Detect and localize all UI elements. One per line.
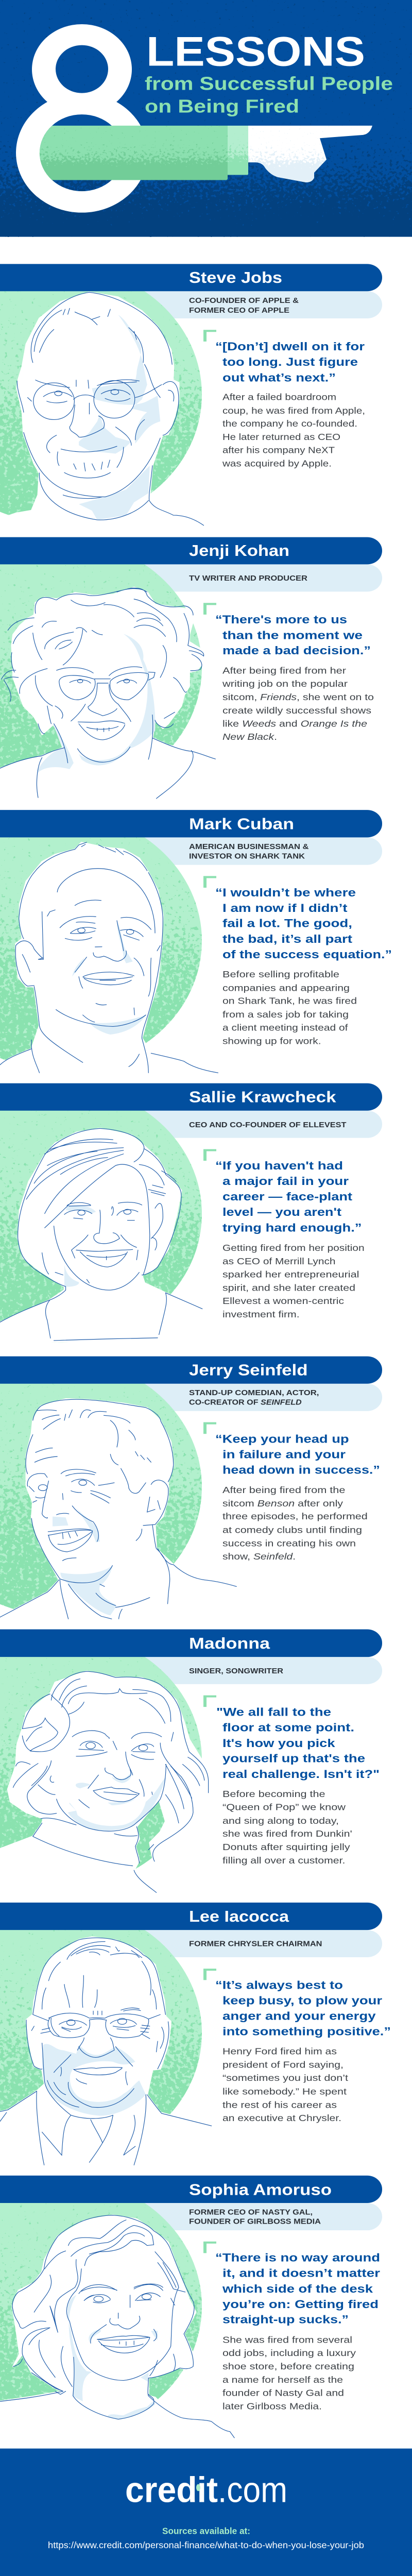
description: create wildly successful shows bbox=[222, 706, 371, 716]
role bbox=[189, 2208, 321, 2226]
description: showing up for work. bbox=[222, 1036, 321, 1046]
subtitle: from Successful People bbox=[145, 74, 393, 94]
portrait: Jerry Seinfeld bbox=[0, 1399, 236, 1620]
description: sparked her entrepreneurial bbox=[222, 1270, 359, 1279]
description bbox=[222, 392, 365, 469]
logo: credit.com: .com bbox=[218, 2470, 287, 2510]
quote: It's how you pick bbox=[222, 1737, 335, 1750]
name: Madonna bbox=[189, 1634, 270, 1652]
description: After a failed boardroom bbox=[222, 392, 336, 402]
quote: straight-up sucks.” bbox=[222, 2313, 349, 2326]
portrait: Steve Jobs bbox=[0, 292, 205, 532]
description bbox=[222, 1485, 368, 1562]
description: odd jobs, including a luxury bbox=[222, 2348, 356, 2358]
portrait: Sophia Amoruso bbox=[0, 2215, 234, 2438]
quote: of the success equation.” bbox=[222, 948, 392, 961]
description: investment firm. bbox=[222, 1310, 300, 1319]
quote bracket bbox=[203, 1696, 216, 1707]
quote: into something positive.” bbox=[222, 2025, 391, 2038]
panel: Sallie Krawcheck bbox=[0, 1083, 382, 1343]
role: CO-CREATOR OF SEINFELD bbox=[189, 1398, 302, 1406]
quote: “There's more to us bbox=[215, 613, 347, 626]
name: Lee Iacocca bbox=[189, 1907, 289, 1925]
quote: head down in success.” bbox=[222, 1464, 380, 1476]
panel: Madonna bbox=[0, 1630, 382, 1892]
role: FORMER CHRYSLER CHAIRMAN bbox=[189, 1940, 322, 1948]
description: Donuts after squirting jelly bbox=[222, 1842, 351, 1852]
quote bracket bbox=[203, 2242, 216, 2253]
description: sitcom, Friends , she went on to bbox=[222, 692, 374, 702]
quote: fail a lot. The good, bbox=[222, 917, 352, 929]
portrait: Mark Cuban bbox=[0, 842, 218, 1077]
subtitle bbox=[145, 74, 393, 117]
quote: in failure and your bbox=[222, 1448, 346, 1461]
quote bbox=[215, 886, 392, 961]
description: as CEO of Merrill Lynch bbox=[222, 1257, 335, 1266]
description bbox=[222, 1243, 365, 1319]
description: the rest of his career as bbox=[222, 2100, 337, 2110]
description: show, Seinfeld . bbox=[222, 1552, 296, 1562]
role bbox=[189, 297, 299, 315]
quote: I am now if I didn’t bbox=[222, 902, 348, 914]
description bbox=[222, 2047, 348, 2123]
quote: it, and it doesn’t matter bbox=[222, 2266, 380, 2279]
description: president of Ford saying, bbox=[222, 2060, 344, 2070]
quote bracket bbox=[203, 1422, 216, 1434]
description: she was fired from Dunkin' bbox=[222, 1829, 352, 1839]
icon: pointing hand and sleeve bbox=[36, 126, 374, 184]
description: He later returned as CEO bbox=[222, 432, 340, 442]
quote: made a bad decision.” bbox=[222, 644, 371, 657]
description: Ellevest a women-centric bbox=[222, 1296, 344, 1306]
description: sitcom Benson after only bbox=[222, 1499, 344, 1509]
description: an executive at Chrysler. bbox=[222, 2113, 341, 2123]
description: was acquired by Apple. bbox=[222, 459, 332, 469]
role: FOUNDER OF GIRLBOSS MEDIA bbox=[189, 2217, 321, 2226]
description: from a sales job for taking bbox=[222, 1010, 349, 1020]
name: Jerry Seinfeld bbox=[189, 1361, 308, 1379]
quote: anger and your energy bbox=[222, 2010, 376, 2022]
role: CO-FOUNDER OF APPLE & bbox=[189, 297, 299, 305]
panel: Lee Iacocca bbox=[0, 1903, 391, 2166]
description: after his company NeXT bbox=[222, 445, 335, 455]
quote: “If you haven't had bbox=[215, 1159, 343, 1172]
panel: Mark Cuban bbox=[0, 810, 392, 1077]
quote: “Keep your head up bbox=[215, 1433, 349, 1445]
description: writing job on the popular bbox=[222, 679, 348, 689]
quote bbox=[215, 1978, 391, 2038]
quote: floor at some point. bbox=[222, 1721, 354, 1734]
quote bbox=[215, 1433, 380, 1476]
title: LESSONS: LESSONS bbox=[146, 28, 365, 74]
name: Steve Jobs bbox=[189, 269, 282, 286]
portrait: Jenji Kohan bbox=[0, 587, 215, 802]
quote: “[Don’t] dwell on it for bbox=[215, 340, 365, 353]
portrait: Madonna bbox=[0, 1671, 209, 1892]
quote: than the moment we bbox=[222, 629, 363, 641]
description bbox=[222, 2335, 356, 2412]
quote: “I wouldn’t be where bbox=[215, 886, 356, 899]
description: a client meeting instead of bbox=[222, 1023, 349, 1033]
footer panel bbox=[0, 2449, 412, 2576]
description: the company he co-founded. bbox=[222, 419, 357, 429]
description: coup, he was fired from Apple, bbox=[222, 406, 365, 416]
name: Jenji Kohan bbox=[189, 542, 289, 560]
description: like Weeds and Orange Is the bbox=[222, 719, 367, 728]
quote: the bad, it’s all part bbox=[222, 933, 352, 945]
sources heading: Sources available at: bbox=[162, 2527, 250, 2536]
quote: career — face-plant bbox=[222, 1190, 352, 1203]
quote bracket bbox=[203, 1969, 216, 1980]
name: Mark Cuban bbox=[189, 815, 294, 833]
quote: “It’s always best to bbox=[215, 1978, 343, 1991]
subtitle: on Being Fired bbox=[145, 96, 299, 117]
name: Sallie Krawcheck bbox=[189, 1088, 336, 1106]
quote: you’re on: Getting fired bbox=[222, 2298, 379, 2311]
quote: yourself up that's the bbox=[222, 1752, 365, 1765]
description: a name for herself as the bbox=[222, 2375, 343, 2385]
role: CEO AND CO-FOUNDER OF ELLEVEST bbox=[189, 1121, 347, 1129]
quote bracket bbox=[203, 330, 216, 342]
description: on Shark Tank, he was fired bbox=[222, 996, 357, 1006]
description: at comedy clubs until finding bbox=[222, 1525, 362, 1535]
quote bbox=[215, 613, 371, 657]
panel: Jenji Kohan bbox=[0, 537, 382, 802]
logo: credit.com: credit bbox=[125, 2470, 218, 2510]
quote bracket bbox=[203, 1149, 216, 1161]
name: Sophia Amoruso bbox=[189, 2181, 332, 2198]
quote bracket bbox=[203, 603, 216, 615]
quote bbox=[216, 1705, 380, 1781]
big numeral 8 bbox=[16, 24, 148, 213]
sources URL: https://www.credit.com/personal-finance/what-to-do-when-you-lose-your-job bbox=[48, 2540, 364, 2550]
description: filling all over a customer. bbox=[222, 1856, 345, 1866]
role bbox=[189, 1389, 319, 1406]
role: FORMER CEO OF NASTY GAL, bbox=[189, 2208, 313, 2216]
quote: out what’s next.” bbox=[222, 371, 336, 384]
role bbox=[189, 843, 309, 860]
description bbox=[222, 970, 357, 1046]
quote bbox=[215, 2251, 380, 2326]
quote: keep busy, to plow your bbox=[222, 1994, 382, 2007]
description: and sing along to today, bbox=[222, 1816, 339, 1826]
quote bracket bbox=[203, 876, 216, 888]
logo: credit.com bbox=[125, 2470, 287, 2510]
description: shoe store, before creating bbox=[222, 2362, 354, 2371]
description: Getting fired from her position bbox=[222, 1243, 365, 1253]
description: After being fired from her bbox=[222, 666, 346, 675]
quote: level — you aren't bbox=[222, 1206, 341, 1218]
panel: Sophia Amoruso bbox=[0, 2176, 382, 2438]
description: “sometimes you just don’t bbox=[222, 2073, 348, 2083]
quote: trying hard enough.” bbox=[222, 1221, 362, 1234]
description: success in creating his own bbox=[222, 1538, 356, 1548]
description: After being fired from the bbox=[222, 1485, 345, 1495]
description: She was fired from several bbox=[222, 2335, 352, 2345]
description: New Black . bbox=[222, 732, 277, 742]
role: AMERICAN BUSINESSMAN & bbox=[189, 843, 309, 851]
role: FORMER CEO OF APPLE bbox=[189, 307, 289, 315]
description: like somebody.” He spent bbox=[222, 2087, 347, 2096]
role: TV WRITER AND PRODUCER bbox=[189, 574, 307, 583]
description: later Girlboss Media. bbox=[222, 2402, 322, 2412]
description: Henry Ford fired him as bbox=[222, 2047, 337, 2057]
role: INVESTOR ON SHARK TANK bbox=[189, 852, 305, 860]
role: SINGER, SONGWRITER bbox=[189, 1667, 283, 1675]
quote bbox=[215, 340, 365, 384]
quote: real challenge. Isn't it?" bbox=[222, 1768, 380, 1781]
quote: which side of the desk bbox=[222, 2282, 373, 2295]
description: Before selling profitable bbox=[222, 970, 339, 979]
quote: too long. Just figure bbox=[222, 355, 358, 368]
description: spirit, and she later created bbox=[222, 1283, 355, 1293]
panel: Steve Jobs bbox=[0, 264, 382, 532]
description: Before becoming the bbox=[222, 1789, 325, 1799]
description bbox=[222, 1789, 352, 1866]
description: three episodes, he performed bbox=[222, 1512, 368, 1521]
description bbox=[222, 666, 374, 742]
description: founder of Nasty Gal and bbox=[222, 2388, 344, 2398]
panel: Jerry Seinfeld bbox=[0, 1357, 382, 1620]
quote bbox=[215, 1159, 362, 1234]
role: STAND-UP COMEDIAN, ACTOR, bbox=[189, 1389, 319, 1397]
header panel bbox=[0, 0, 412, 237]
portrait: Sallie Krawcheck bbox=[0, 1128, 202, 1342]
quote: “There is no way around bbox=[215, 2251, 380, 2264]
portrait: Lee Iacocca bbox=[0, 1937, 212, 2166]
quote: "We all fall to the bbox=[216, 1705, 331, 1718]
quote: a major fail in your bbox=[222, 1175, 349, 1188]
description: “Queen of Pop” we know bbox=[222, 1802, 346, 1812]
description: companies and appearing bbox=[222, 983, 350, 993]
